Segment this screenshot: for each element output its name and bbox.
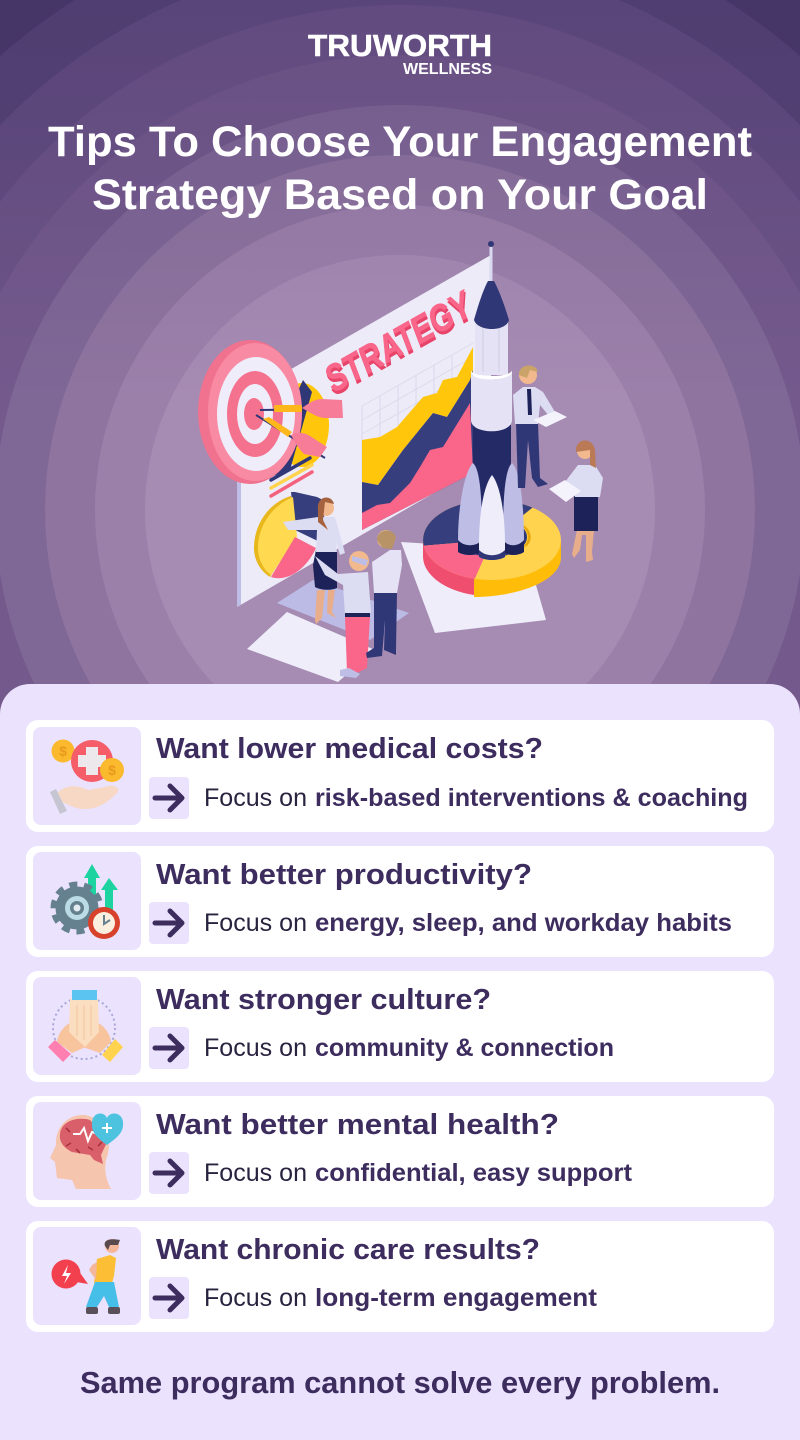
person: woman with clipboard: [549, 440, 603, 562]
donut chart: [423, 504, 561, 597]
focus text: Focus on: [204, 784, 307, 812]
board heading: STRATEGY: [319, 286, 483, 404]
icon: arrow: [149, 902, 189, 944]
heading: Want lower medical costs?: [156, 733, 543, 765]
icon: arrow: [149, 1277, 189, 1319]
icon: medical costs in hand: $: [59, 743, 67, 759]
illustration: strategy board, rocket and team: [198, 241, 603, 682]
card: stronger culture: [26, 971, 774, 1082]
focus text: community & connection: [315, 1034, 614, 1062]
focus text: confidential, easy support: [315, 1159, 633, 1187]
icon: arrow: [149, 1027, 189, 1069]
person: man in navy trousers: [366, 530, 402, 658]
focus text: Focus on: [204, 1034, 307, 1062]
target with darts: [198, 340, 343, 484]
card: better productivity: [26, 846, 774, 957]
board list lines: [271, 458, 312, 496]
icon: medical costs in hand: [50, 740, 124, 814]
focus text: Focus on: [204, 909, 307, 937]
card: chronic care results: [26, 1221, 774, 1332]
logo: [308, 28, 492, 78]
icon: arrow: [149, 777, 189, 819]
pie chart on board: [254, 492, 326, 578]
icon: medical costs in hand: $: [108, 762, 116, 778]
title: Strategy Based on Your Goal: [92, 171, 708, 219]
floor papers: [247, 542, 546, 682]
card: better mental health: [26, 1096, 774, 1207]
logo: WELLNESS: [403, 61, 492, 78]
icon: head, brain and heart: [50, 1113, 123, 1189]
icon: gear, arrows and clock: [54, 864, 120, 939]
lower panel: [0, 684, 800, 1440]
logo: TRUWORTH: [308, 28, 492, 63]
area chart on board: [362, 343, 473, 530]
icon: arrow: [149, 1152, 189, 1194]
title: Tips To Choose Your Engagement: [48, 118, 752, 166]
closing statement: Same program cannot solve every problem.: [80, 1365, 720, 1400]
darts: [256, 399, 343, 458]
heading: Want better productivity?: [156, 859, 532, 891]
person: woman presenting: [283, 497, 345, 624]
heading: Want stronger culture?: [156, 984, 491, 1016]
focus text: energy, sleep, and workday habits: [315, 909, 732, 937]
focus text: long-term engagement: [315, 1284, 598, 1312]
board heading: STRATEGY: [318, 283, 482, 401]
focus text: [204, 1284, 598, 1312]
person: man in pink trousers: [315, 551, 371, 678]
rocket: [458, 241, 524, 560]
focus text: Focus on: [204, 1284, 307, 1312]
heading: Want better mental health?: [156, 1109, 559, 1141]
focus text: risk-based interventions & coaching: [315, 784, 748, 812]
icon: stacked hands: [48, 990, 123, 1062]
person: man with clipboard: [513, 366, 567, 488]
strategy board: [237, 255, 491, 607]
title: [48, 118, 752, 219]
focus text: Focus on: [204, 1159, 307, 1187]
heading: Want chronic care results?: [156, 1234, 540, 1266]
icon: man with back pain: [52, 1239, 120, 1314]
card: lower medical costs: [26, 720, 774, 832]
